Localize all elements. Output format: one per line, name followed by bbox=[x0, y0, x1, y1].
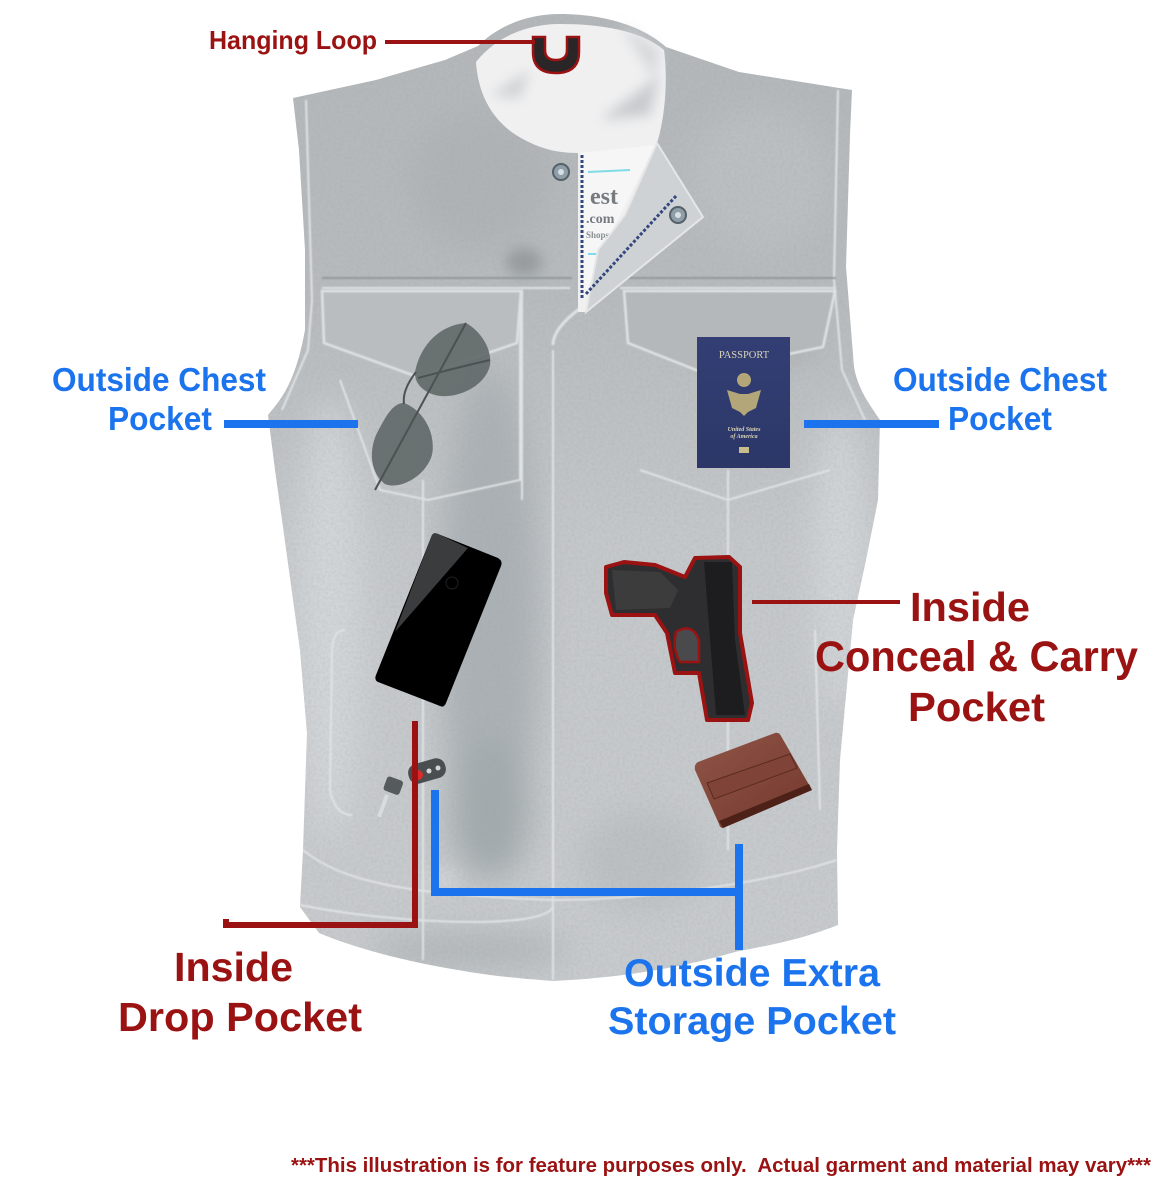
vest seams bbox=[282, 90, 865, 980]
wallet bottom edge bbox=[719, 784, 812, 828]
label: inside conceal and carry pocket: Pocket bbox=[908, 684, 1045, 730]
t-shirt with logo text: est bbox=[590, 184, 618, 210]
passport: of America bbox=[730, 434, 758, 440]
key fob bbox=[406, 756, 448, 786]
label: outside chest pocket right bbox=[893, 361, 1107, 437]
label: outside chest pocket left: Pocket bbox=[108, 400, 212, 437]
passport: PASSPORT bbox=[719, 350, 770, 361]
label: inside conceal and carry pocket bbox=[815, 584, 1138, 730]
key head bbox=[383, 776, 404, 796]
t-shirt with logo text: Shops bbox=[586, 230, 610, 240]
label: outside chest pocket right: Pocket bbox=[948, 400, 1052, 437]
label: outside extra storage pocket: Outside Extra bbox=[624, 952, 880, 995]
right chest pocket flap bbox=[624, 291, 835, 372]
label: outside chest pocket left: Outside Chest bbox=[52, 361, 266, 398]
hanging loop icon bbox=[533, 37, 579, 73]
passport: United States bbox=[728, 427, 761, 433]
leader: outside extra storage pocket bbox=[435, 790, 739, 950]
keys bbox=[379, 756, 448, 817]
vest body bbox=[260, 0, 890, 990]
vest bbox=[260, 0, 890, 990]
lens bottom bbox=[372, 403, 433, 486]
leader: outside chest pocket left bbox=[224, 420, 358, 428]
footer disclaimer: ***This illustration is for feature purposes only. Actual garment and material may vary*** bbox=[291, 1155, 1151, 1177]
leader: conceal and carry bbox=[752, 600, 900, 604]
grip texture bbox=[612, 570, 678, 610]
leader: inside drop pocket bbox=[226, 721, 415, 925]
label: inside conceal and carry pocket: Conceal & Carry bbox=[815, 633, 1138, 681]
eagle emblem bbox=[727, 373, 761, 416]
label: inside drop pocket: Drop Pocket bbox=[118, 994, 362, 1040]
label: inside conceal and carry pocket: Inside bbox=[910, 584, 1030, 630]
phone bbox=[375, 533, 502, 707]
label: outside extra storage pocket: Storage Pocket bbox=[608, 1000, 896, 1043]
phone glare bbox=[395, 533, 468, 632]
label: outside chest pocket left bbox=[52, 361, 266, 437]
passport bbox=[697, 337, 790, 468]
lining folds bbox=[490, 24, 660, 120]
zipper bbox=[582, 155, 676, 300]
label: inside drop pocket bbox=[118, 944, 362, 1040]
t-shirt with logo text bbox=[580, 145, 655, 300]
pistol bbox=[606, 557, 752, 720]
snap left bbox=[553, 164, 569, 180]
label: outside extra storage pocket bbox=[608, 952, 896, 1043]
frame bbox=[375, 323, 490, 490]
trigger guard bbox=[675, 628, 699, 662]
wallet bbox=[695, 733, 812, 828]
neck lining bbox=[476, 24, 703, 312]
label: inside drop pocket: Inside bbox=[174, 944, 293, 990]
sunglasses bbox=[372, 323, 490, 490]
leather grain bbox=[292, 418, 870, 962]
snap right bbox=[670, 207, 686, 223]
left chest pocket flap bbox=[322, 291, 521, 377]
lapel bbox=[586, 143, 703, 312]
key blade bbox=[379, 795, 387, 817]
slide bbox=[704, 562, 745, 715]
label: hanging loop: Hanging Loop bbox=[209, 25, 377, 55]
leader: outside chest pocket right bbox=[804, 420, 939, 428]
leader: hanging loop bbox=[385, 40, 535, 44]
label: outside chest pocket right: Outside Chest bbox=[893, 361, 1107, 398]
lens top bbox=[415, 323, 490, 396]
t-shirt with logo text: .com bbox=[586, 212, 615, 227]
wallet strap bbox=[707, 754, 797, 799]
